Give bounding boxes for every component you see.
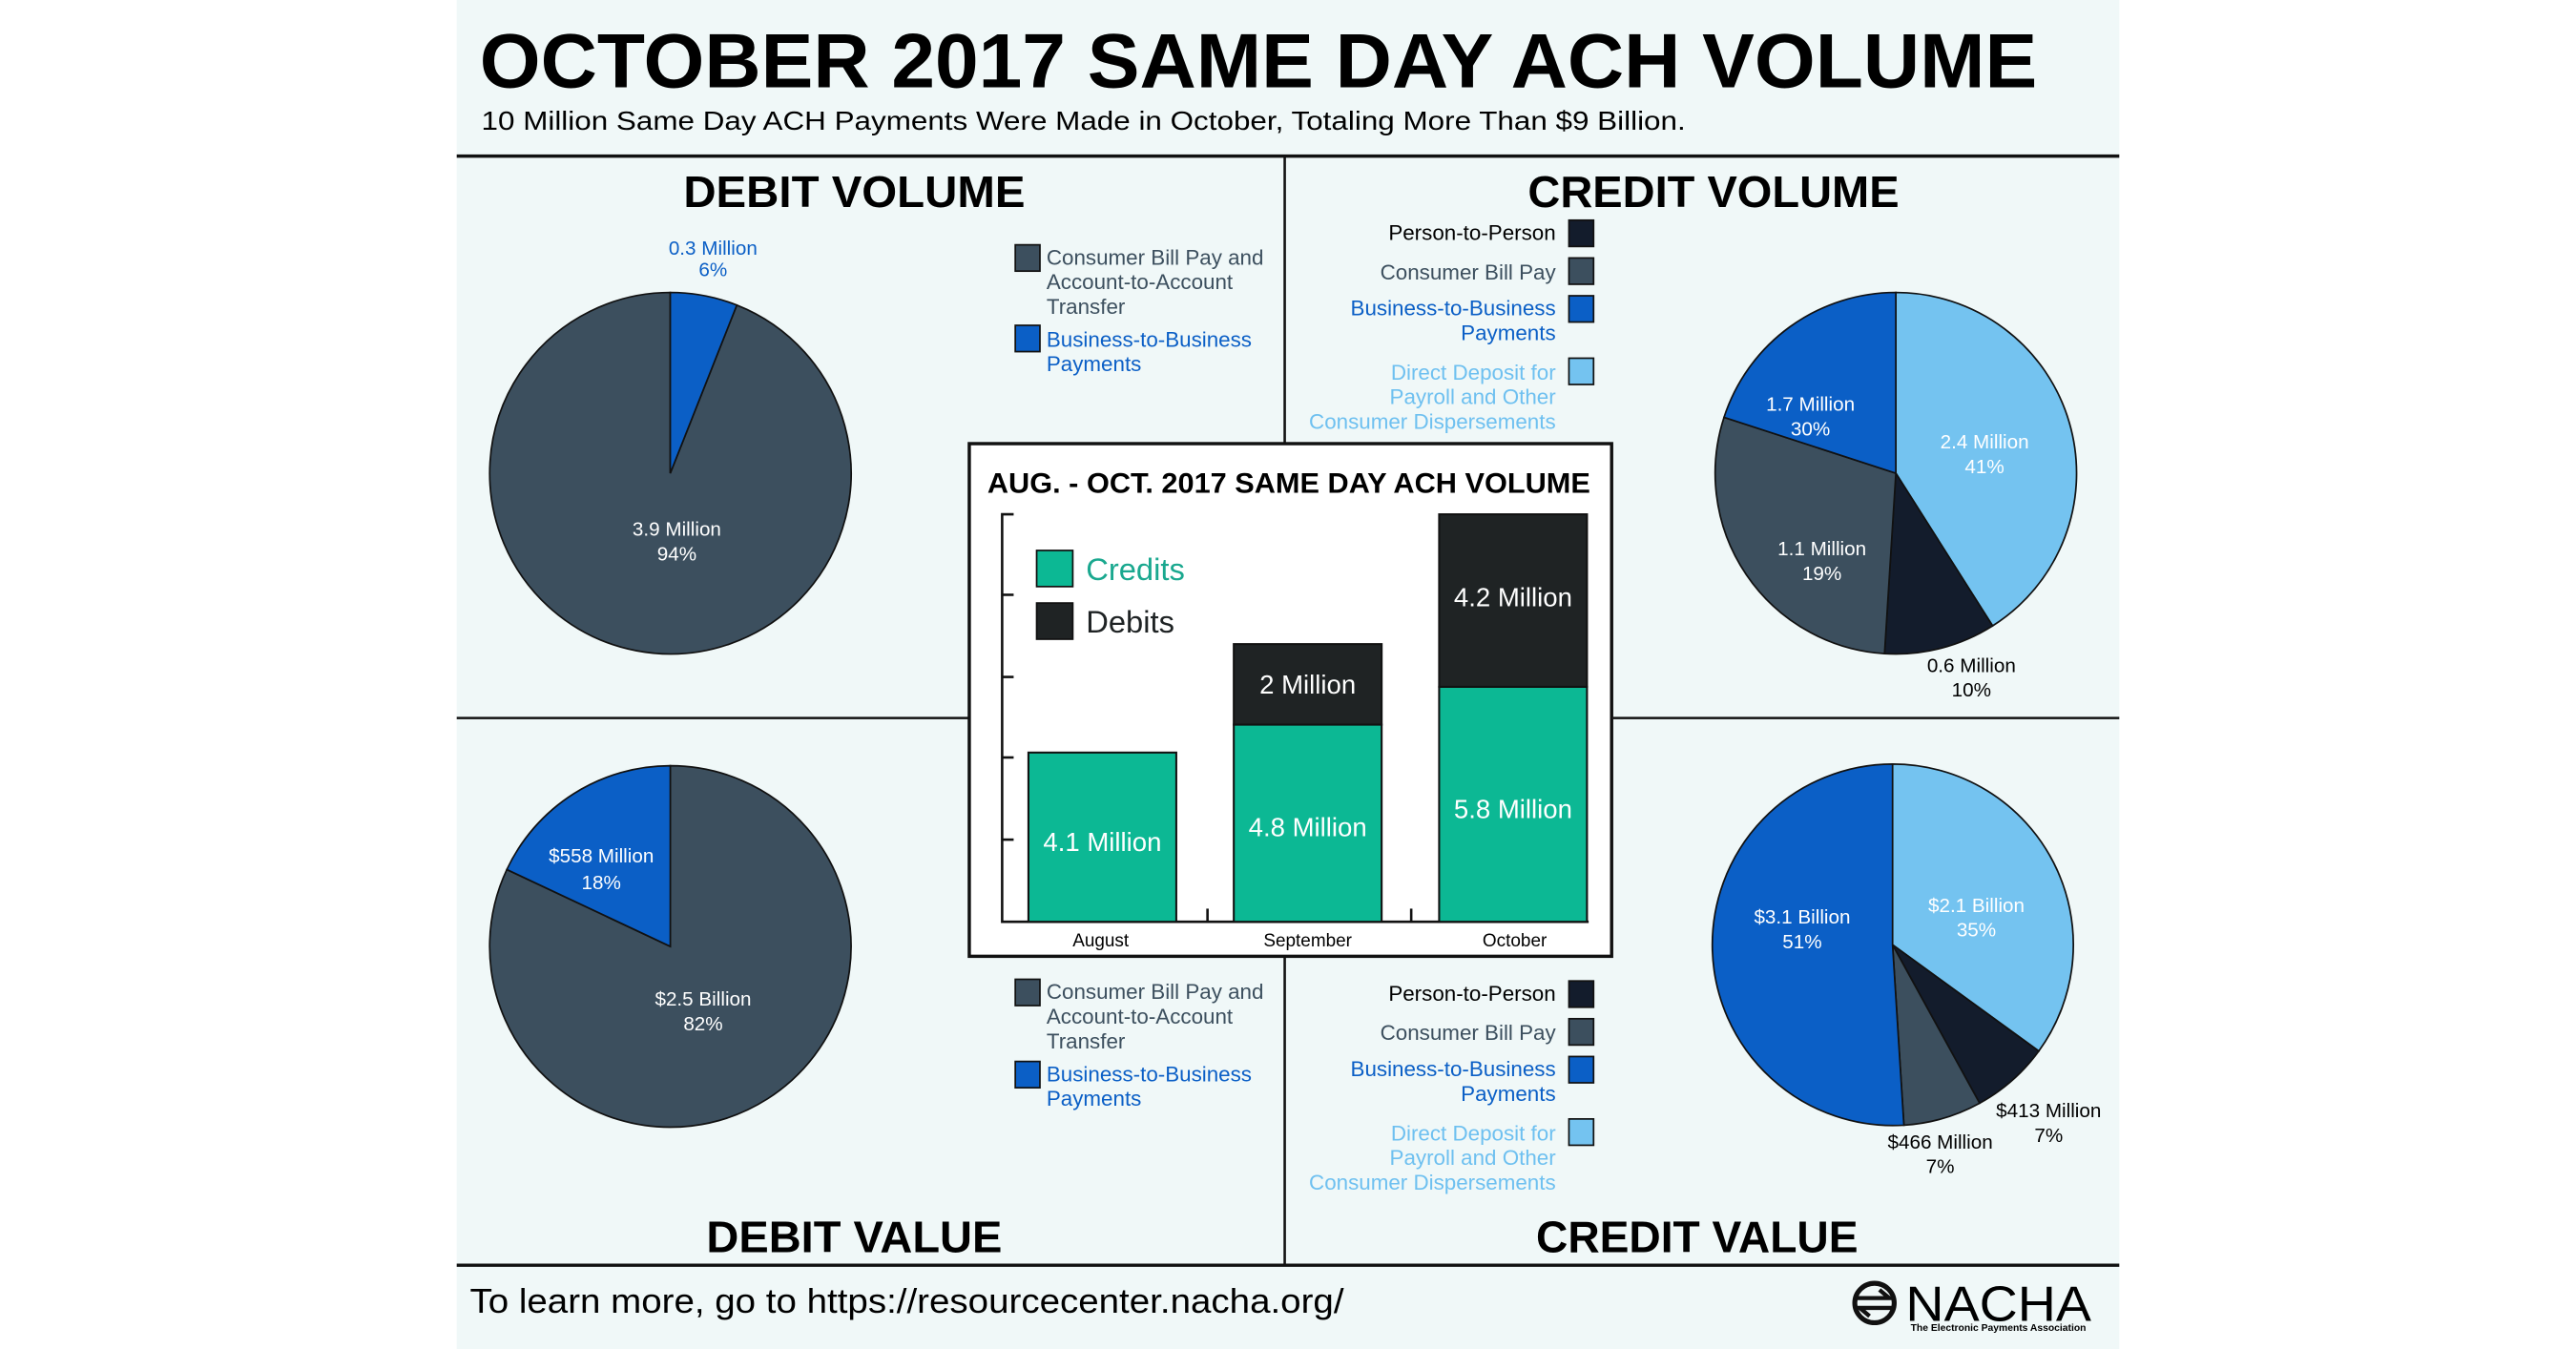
legend: credit volume — [1309, 220, 1593, 434]
bar chart panel: Credits — [1086, 551, 1185, 587]
legend: debit value: Consumer Bill Pay and — [1047, 980, 1263, 1004]
legend: debit value — [1015, 979, 1263, 1110]
legend: credit value: Consumer Bill Pay — [1381, 1021, 1556, 1045]
legend: credit value: Payroll and Other — [1390, 1146, 1556, 1170]
bar chart panel: 4.2 Million — [1454, 583, 1572, 612]
pie: debit volume: 3.9 Million — [633, 518, 721, 540]
legend: credit volume: Payments — [1461, 322, 1556, 345]
legend: debit value: Payments — [1047, 1087, 1141, 1110]
pie: credit value: $2.1 Billion — [1928, 895, 2025, 917]
logo: NACHA: The Electronic Payments Association — [1911, 1323, 2086, 1334]
legend: debit volume: Transfer — [1047, 295, 1126, 319]
bar chart panel: 4.1 Million — [1043, 827, 1161, 857]
bar chart panel — [969, 444, 1611, 956]
pie: debit value: 18% — [582, 872, 621, 894]
pie: debit value: $2.5 Billion — [654, 988, 752, 1010]
logo: NACHA — [1855, 1276, 2092, 1334]
bar chart panel: 2 Million — [1259, 670, 1356, 699]
bar chart panel: Debits — [1086, 604, 1174, 639]
legend: credit volume: Payroll and Other — [1390, 385, 1556, 409]
legend: debit volume — [1015, 245, 1263, 376]
pie: debit value — [489, 766, 851, 1127]
subtitle: 10 Million Same Day ACH Payments Were Made in October, Totaling More Than $9 Billion. — [482, 106, 1686, 135]
legend: debit value: Transfer — [1047, 1029, 1126, 1053]
pie: debit value: 82% — [683, 1013, 723, 1035]
pie: credit value: 7% — [1926, 1156, 1955, 1178]
legend: debit volume: Business-to-Business — [1047, 327, 1252, 351]
title: OCTOBER 2017 SAME DAY ACH VOLUME — [480, 18, 2037, 104]
legend: debit value: Business-to-Business — [1047, 1062, 1252, 1086]
pie: credit value: 35% — [1957, 920, 1996, 942]
bar chart panel: 5.8 Million — [1454, 795, 1572, 824]
pie: credit volume — [1715, 293, 2077, 701]
legend: credit value: Business-to-Business — [1351, 1057, 1556, 1081]
bar chart panel: 4.8 Million — [1249, 813, 1367, 842]
pie: credit value: 7% — [2034, 1125, 2063, 1147]
pie: debit volume: 6% — [698, 259, 727, 280]
bar chart panel: October — [1483, 931, 1547, 951]
footer link: To learn more, go to https://resourcecenter.nacha.org/ — [469, 1281, 1345, 1320]
legend: debit volume: Account-to-Account — [1047, 270, 1234, 294]
pie: credit value: $466 Million — [1887, 1131, 1993, 1153]
bar chart panel: September — [1263, 931, 1352, 951]
pie: credit volume: 1.1 Million — [1777, 538, 1866, 560]
pie: credit value: $3.1 Billion — [1754, 906, 1850, 928]
pie: credit volume: 19% — [1802, 563, 1841, 585]
legend: debit value: Account-to-Account — [1047, 1005, 1234, 1028]
pie: debit value: $558 Million — [549, 845, 654, 867]
legend: credit value: Direct Deposit for — [1391, 1121, 1556, 1145]
pie: debit volume: 0.3 Million — [669, 238, 758, 259]
pie: credit volume: 30% — [1791, 418, 1830, 440]
pie: credit volume: 10% — [1952, 679, 1991, 701]
legend: credit value — [1309, 981, 1593, 1194]
bar chart panel: AUG. - OCT. 2017 SAME DAY ACH VOLUME — [987, 469, 1590, 500]
legend: credit volume: Consumer Bill Pay — [1381, 260, 1556, 284]
pie: credit volume: 0.6 Million — [1927, 654, 2016, 676]
bar chart panel: August — [1072, 931, 1130, 951]
heading: credit value: CREDIT VALUE — [1536, 1212, 1859, 1261]
heading: credit volume: CREDIT VOLUME — [1527, 167, 1900, 217]
pie: credit value — [1713, 764, 2101, 1178]
legend: credit value: Payments — [1461, 1082, 1556, 1106]
pie: credit value: $413 Million — [1996, 1100, 2101, 1122]
pie: credit value: 51% — [1782, 931, 1822, 953]
legend: credit volume: Consumer Dispersements — [1309, 410, 1556, 434]
pie: credit volume: 2.4 Million — [1941, 431, 2029, 453]
legend: debit volume: Payments — [1047, 352, 1141, 376]
legend: credit value: Person-to-Person — [1388, 982, 1556, 1006]
legend: credit volume: Direct Deposit for — [1391, 361, 1556, 384]
pie: debit volume: 94% — [657, 543, 696, 565]
pie: credit volume: 41% — [1964, 456, 2005, 478]
heading: debit value: DEBIT VALUE — [706, 1212, 1002, 1261]
legend: credit volume: Person-to-Person — [1388, 220, 1556, 244]
legend: debit volume: Consumer Bill Pay and — [1047, 245, 1263, 269]
legend: credit volume: Business-to-Business — [1351, 297, 1556, 321]
legend: credit value: Consumer Dispersements — [1309, 1171, 1556, 1194]
logo: NACHA: NACHA — [1905, 1276, 2092, 1332]
pie: debit volume — [489, 238, 851, 654]
background panel — [457, 0, 2119, 1349]
pie: credit volume: 1.7 Million — [1766, 394, 1855, 416]
heading: debit volume: DEBIT VOLUME — [683, 167, 1025, 217]
